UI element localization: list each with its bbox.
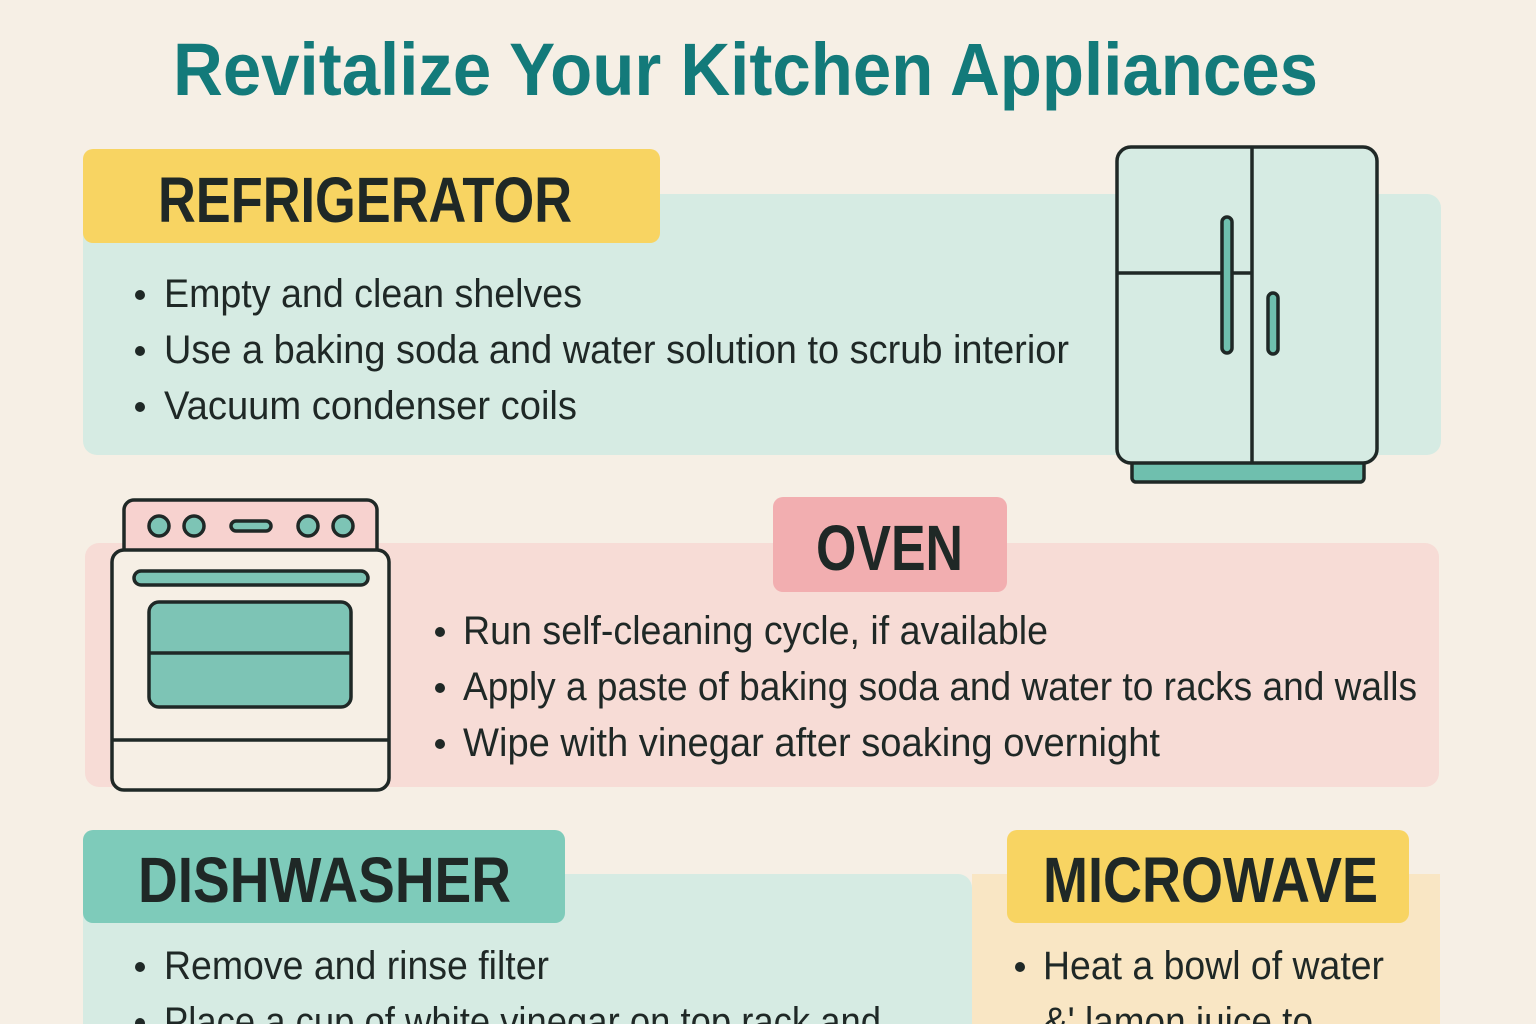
- text block: refrigerator tips: Use a baking soda and water solution to scrub interior: [164, 328, 1069, 372]
- heading: refrigerator tab: REFRIGERATOR: [158, 164, 572, 236]
- text block: dishwasher tips: [135, 944, 881, 1024]
- heading: oven tab: [773, 497, 1007, 592]
- heading: dishwasher tab: [83, 830, 565, 923]
- panel: oven: [85, 497, 1439, 787]
- heading: microwave tab: [1007, 830, 1409, 923]
- text block: refrigerator tips: Empty and clean shelves: [164, 272, 582, 316]
- panel: dishwasher: [83, 830, 972, 1024]
- icon: refrigerator: [1117, 147, 1377, 482]
- text block: oven tips: Run self-cleaning cycle, if available: [463, 609, 1048, 653]
- text block: oven tips: Apply a paste of baking soda and water to racks and walls: [463, 665, 1417, 709]
- text block: oven tips: Wipe with vinegar after soaking overnight: [463, 721, 1160, 765]
- title: Revitalize Your Kitchen Appliances: [173, 28, 1318, 111]
- panel: refrigerator: [83, 149, 1441, 455]
- text block: refrigerator tips: [135, 272, 1069, 428]
- heading: dishwasher tab: DISHWASHER: [138, 844, 511, 916]
- text block: microwave tips: [1015, 944, 1384, 1024]
- text block: refrigerator tips: Vacuum condenser coils: [164, 384, 577, 428]
- panel: microwave: [972, 830, 1440, 1024]
- text block: dishwasher tips: Remove and rinse filter: [164, 944, 549, 988]
- heading: refrigerator tab: [83, 149, 660, 243]
- text block: oven tips: [435, 609, 1417, 765]
- icon: oven: [112, 500, 389, 790]
- text block: microwave tips: Heat a bowl of water: [1043, 944, 1384, 988]
- heading: oven tab: OVEN: [816, 512, 963, 584]
- heading: microwave tab: MICROWAVE: [1043, 844, 1378, 916]
